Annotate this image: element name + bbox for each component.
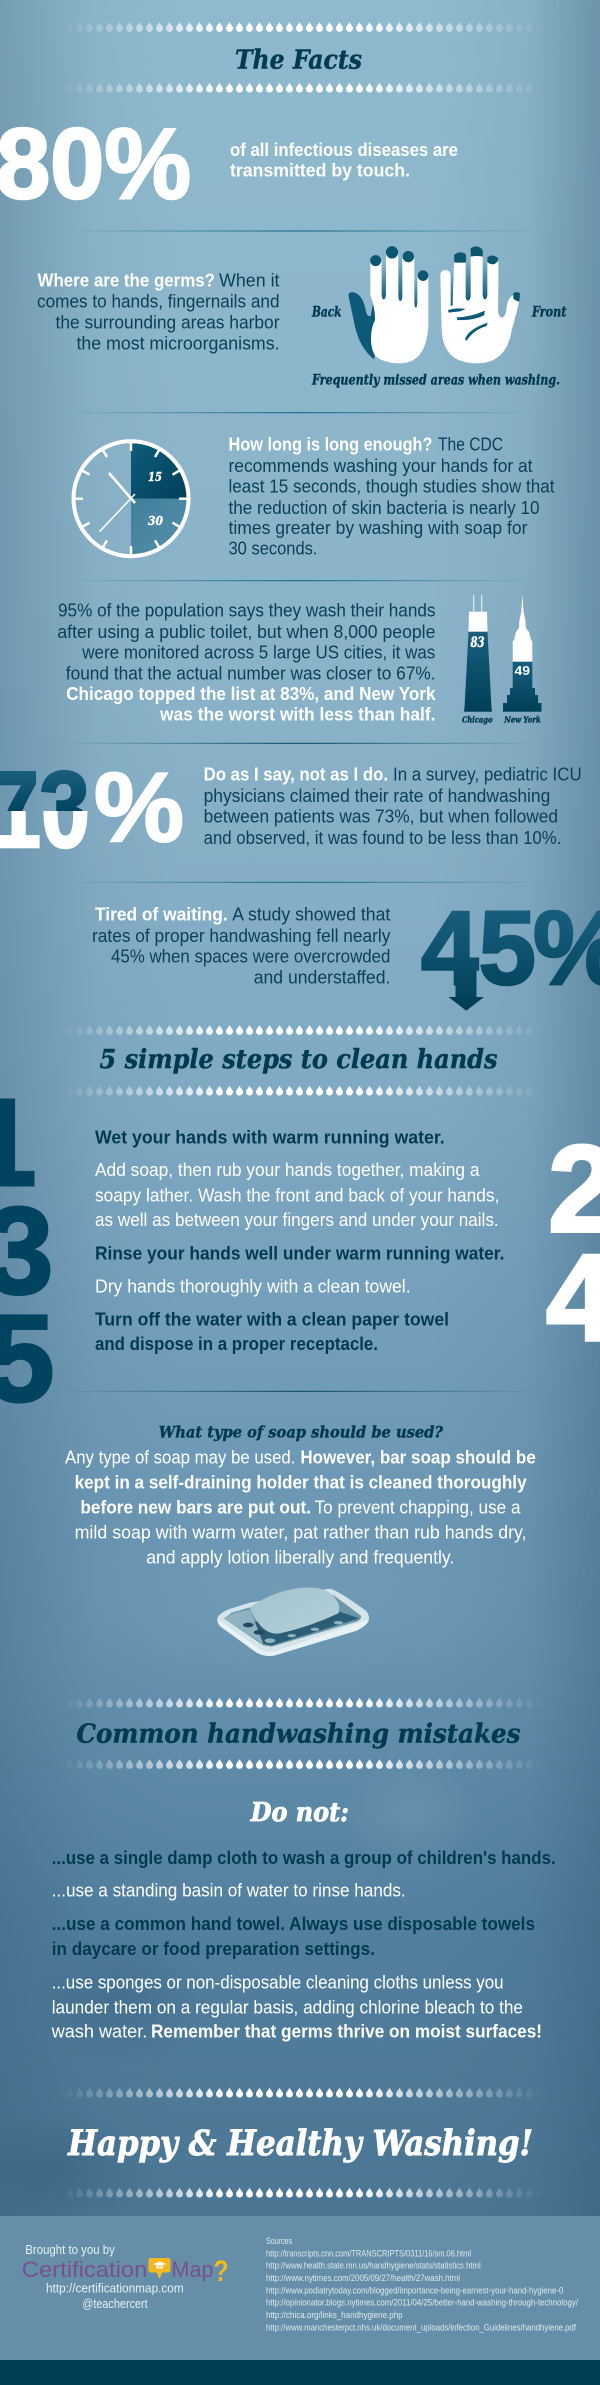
- list: sources: http://transcripts.cnn.com/TRANSCRIPTS/0311/16/sm.06.html: [266, 2248, 471, 2259]
- list: mistakes: ...use a standing basin of water to rinse hands.: [52, 1881, 406, 1901]
- list: mistakes: Remember that germs thrive on moist surfaces!: [151, 2022, 542, 2042]
- text: tired of waiting: rates of proper handwashing fell nearly: [92, 926, 390, 946]
- chart: Chicago tower 83: 83: [470, 635, 484, 651]
- icon: clock: 15: [148, 469, 162, 484]
- list: sources: http://www.health.state.mn.us/handhygiene/stats/statistics.html: [266, 2261, 481, 2272]
- logo: Certification Map: [22, 2255, 228, 2288]
- list: mistakes: launder them on a regular basis, adding chlorine bleach to the: [52, 1997, 523, 2017]
- footer bar: [0, 2360, 600, 2385]
- drop divider: below 5 steps: [60, 1086, 545, 1096]
- text: soap advice: mild soap with warm water, pat rather than rub hands dry,: [75, 1522, 527, 1542]
- link: certificationmap: http://certificationmap.com: [46, 2280, 184, 2295]
- text: where are the germs: Where are the germs?: [38, 271, 215, 291]
- stat: 80%: 80%: [0, 108, 191, 220]
- credit: brought to you by: Brought to you by: [25, 2242, 115, 2257]
- text: where are the germs: When it: [219, 271, 280, 291]
- title: The Facts: The Facts: [235, 44, 362, 76]
- text: 80% caption: transmitted by touch.: [230, 161, 410, 181]
- closing message: Happy & Healthy Washing!: [67, 2123, 533, 2164]
- text: public toilet survey: was the worst with less than half.: [159, 705, 436, 725]
- list: washing steps: Turn off the water with a clean paper towel: [95, 1309, 449, 1329]
- text: public toilet survey: found that the actual number was closer to 67%.: [66, 663, 436, 683]
- text: do as I say: Do as I say, not as I do.: [204, 765, 388, 785]
- label: Front: Front: [531, 305, 567, 321]
- drop divider: below closing: [60, 2188, 545, 2198]
- list: mistakes: wash water.: [51, 2022, 147, 2042]
- list: mistakes: ...use a common hand towel. Always use disposable towels: [52, 1914, 535, 1934]
- stat: 73% over 10%: %: [94, 752, 184, 862]
- chart: Chicago tower 83: Chicago: [462, 716, 493, 726]
- text: do as I say: In a survey, pediatric ICU: [393, 765, 582, 785]
- text: how long is long enough: the reduction of skin bacteria is nearly 10: [228, 498, 540, 518]
- label: Back: Back: [311, 305, 342, 321]
- text: how long is long enough: How long is long enough?: [228, 435, 432, 455]
- chart: New York tower 49: [503, 595, 542, 726]
- subheading: what type of soap: What type of soap should be used?: [159, 1423, 444, 1442]
- chart: New York tower 49: New York: [504, 716, 541, 726]
- text: do as I say: between patients was 73%, but when followed: [204, 807, 558, 827]
- icon: clock: 30: [148, 513, 163, 528]
- list: mistakes: ...use sponges or non-disposable cleaning cloths unless you: [52, 1972, 504, 1992]
- icon: clock: [73, 440, 190, 557]
- list: mistakes: in daycare or food preparation settings.: [52, 1939, 375, 1959]
- text: tired of waiting: [92, 905, 390, 987]
- text: soap advice: and apply lotion liberally and frequently.: [146, 1547, 454, 1567]
- text: public toilet survey: 95% of the population says they wash their hands: [58, 601, 436, 621]
- text: tired of waiting: A study showed that: [232, 905, 390, 925]
- text: soap advice: To prevent chapping, use a: [315, 1497, 521, 1517]
- icon: front hand: [440, 246, 520, 363]
- panel: footer: [0, 2216, 600, 2360]
- list: washing steps: as well as between your fingers and under your nails.: [95, 1210, 499, 1230]
- list: washing steps: [95, 1127, 504, 1354]
- list: washing steps: soapy lather. Wash the front and back of your hands,: [95, 1185, 499, 1205]
- text: do as I say: [204, 765, 582, 848]
- text: soap advice: Any type of soap may be used.: [65, 1447, 295, 1467]
- logo: Certification Map: Certification: [22, 2257, 147, 2282]
- text: public toilet survey: [57, 601, 436, 725]
- icon: back hand: [348, 246, 428, 363]
- drop divider: below mistakes: [60, 1759, 545, 1769]
- text: public toilet survey: after using a public toilet, but when 8,000 people: [57, 622, 435, 642]
- text: where are the germs: [37, 271, 280, 353]
- heading: Do not: Do not:: [250, 1798, 349, 1828]
- chart: New York tower 49: 49: [514, 663, 530, 678]
- text: tired of waiting: 45% when spaces were overcrowded: [111, 947, 390, 967]
- stat: 73% over 10%: [0, 770, 182, 850]
- text: public toilet survey: Chicago topped the list at 83%, and New York: [66, 684, 436, 704]
- text: soap advice: kept in a self-draining holder that is cleaned thoroughly: [75, 1472, 527, 1492]
- icon: soap dish: [217, 1588, 369, 1656]
- list: washing steps: Add soap, then rub your hands together, making a: [95, 1160, 480, 1180]
- text: how long is long enough: times greater by washing with soap for: [228, 518, 528, 538]
- text: how long is long enough: [228, 435, 554, 559]
- list: sources: [266, 2236, 578, 2333]
- drop divider: above The Facts: [60, 22, 545, 32]
- drop divider: above mistakes: [60, 1698, 545, 1708]
- text: tired of waiting: and understaffed.: [254, 967, 390, 987]
- text: how long is long enough: The CDC: [438, 435, 503, 455]
- text: do as I say: and observed, it was found to be less than 10%.: [204, 828, 561, 848]
- text: 80% caption: [230, 140, 458, 181]
- text: do as I say: physicians claimed their rate of handwashing: [204, 786, 550, 806]
- chart: Chicago tower 83: [462, 595, 493, 726]
- heading: common handwashing mistakes: Common handwashing mistakes: [76, 1720, 521, 1750]
- handle: teachercert: @teachercert: [82, 2296, 148, 2311]
- logo: Certification Map: ?: [214, 2255, 228, 2288]
- list: mistakes: [51, 1848, 556, 2042]
- list: sources: http://chica.org/links_handhygiene.php: [266, 2310, 403, 2321]
- list: washing steps: Dry hands thoroughly with a clean towel.: [95, 1276, 411, 1296]
- text: public toilet survey: were monitored across 5 large US cities, it was: [81, 643, 435, 663]
- text: how long is long enough: least 15 seconds, though studies show that: [228, 477, 554, 497]
- list: sources: Sources: [266, 2236, 292, 2247]
- list: mistakes: ...use a single damp cloth to wash a group of children's hands.: [52, 1848, 556, 1868]
- icon: hands diagram: [348, 246, 520, 363]
- text: soap advice: [65, 1447, 536, 1567]
- text: where are the germs: comes to hands, fingernails and: [37, 292, 280, 312]
- text: 80% caption: of all infectious diseases are: [230, 140, 458, 160]
- drop divider: above 5 steps: [60, 1025, 545, 1035]
- list: sources: http://www.nytimes.com/2005/09/27/health/27wash.html: [266, 2273, 460, 2284]
- text: soap advice: before new bars are put out.: [80, 1497, 311, 1517]
- stat: 45% with down arrow: [421, 890, 600, 1011]
- list: washing steps: Rinse your hands well under warm running water.: [95, 1243, 504, 1263]
- list: washing steps: and dispose in a proper receptacle.: [95, 1334, 378, 1354]
- drop divider: above closing: [60, 2088, 545, 2098]
- text: tired of waiting: Tired of waiting.: [95, 905, 228, 925]
- text: how long is long enough: recommends washing your hands for at: [228, 456, 532, 476]
- list: washing steps: Wet your hands with warm running water.: [95, 1127, 445, 1147]
- text: how long is long enough: 30 seconds.: [228, 539, 318, 559]
- drop divider: below The Facts: [60, 83, 545, 93]
- text: soap advice: However, bar soap should be: [300, 1447, 536, 1467]
- text: where are the germs: the most microorganisms.: [76, 333, 280, 353]
- heading: 5 simple steps: 5 simple steps to clean hands: [100, 1045, 498, 1075]
- text: where are the germs: the surrounding areas harbor: [56, 313, 280, 333]
- stat: 45% with down arrow: 45: [421, 890, 536, 1007]
- logo: Certification Map: Map: [172, 2257, 214, 2282]
